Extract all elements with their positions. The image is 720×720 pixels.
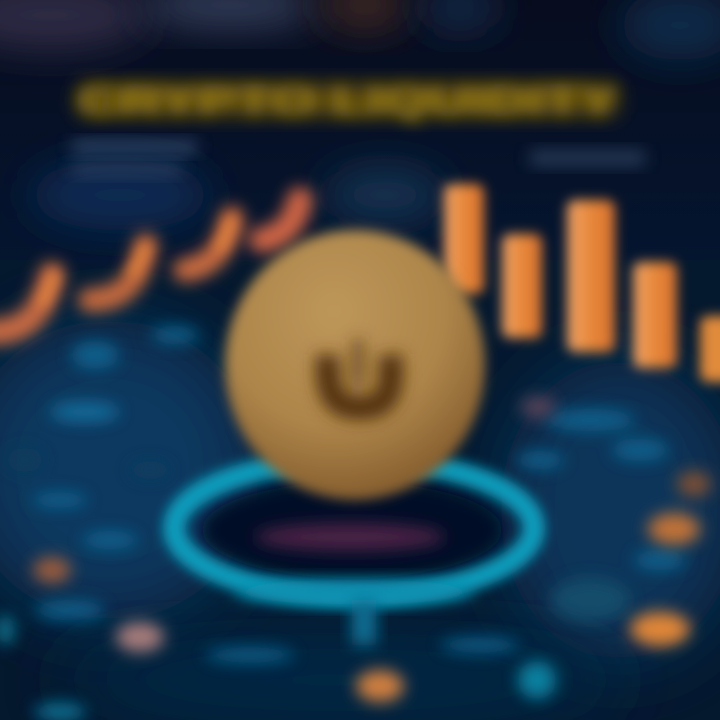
- orange network nodes: [33, 396, 711, 702]
- subtitle text left: [72, 140, 197, 176]
- orange bar chart: [444, 184, 720, 382]
- subtitle text right: [530, 150, 645, 166]
- circuit network texture: [0, 326, 686, 720]
- gold coin: [225, 230, 485, 500]
- rising orange trend line: [0, 200, 300, 332]
- cyan ring platform: [174, 460, 534, 645]
- icon: coin emblem: [327, 340, 391, 408]
- title: CRYPTO LIQUIDITY: [78, 80, 618, 121]
- title: [78, 80, 618, 121]
